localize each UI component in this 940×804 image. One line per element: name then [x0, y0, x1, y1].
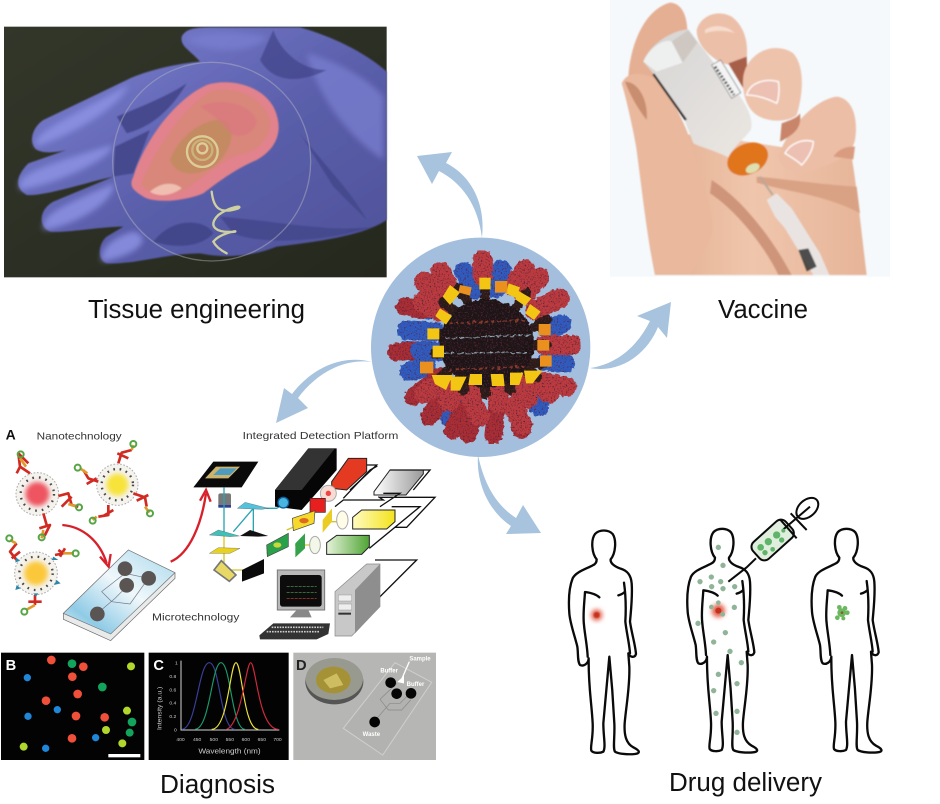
icon: purple gloved hand	[18, 27, 387, 263]
y axis ticks: 0	[174, 727, 177, 733]
panel A: nano and microtechnology detection diagram	[6, 426, 435, 641]
label: Drug delivery: Drug delivery	[669, 769, 822, 797]
stems	[433, 283, 547, 393]
front red spikes	[423, 259, 572, 425]
back red spikes	[396, 307, 522, 435]
icon: orange cap	[722, 136, 773, 182]
tumour with particles	[709, 600, 725, 617]
ring finger	[778, 97, 856, 173]
chip labels: Sample	[409, 657, 431, 663]
icon: fingernails	[747, 80, 779, 103]
axes	[181, 661, 279, 730]
green particles in syringe	[757, 529, 785, 555]
yellow and orange collars	[420, 278, 552, 391]
chip labels: Waste	[363, 732, 381, 738]
spikes and core	[396, 259, 572, 435]
microfluidic chip	[343, 663, 432, 755]
third finger	[728, 57, 748, 97]
optics paths	[224, 487, 337, 570]
x axis ticks: 600	[242, 737, 250, 743]
figure 1: body with tumour	[569, 530, 639, 754]
front blue spike	[420, 351, 435, 352]
circulating particles	[695, 545, 744, 735]
blue beads	[24, 674, 99, 752]
y axis ticks: 0.4	[169, 701, 176, 707]
y axis ticks: 1	[175, 661, 178, 667]
icon: coil in ear	[187, 136, 218, 167]
panel letter D: D	[296, 658, 307, 674]
y axis ticks: 0.6	[169, 687, 176, 693]
pointer arrow	[399, 662, 409, 683]
icon: coin	[305, 658, 363, 704]
label: Diagnosis: Diagnosis	[160, 771, 275, 799]
icon: glass vial	[643, 29, 752, 157]
x axis ticks: 400	[176, 737, 185, 743]
label: Tissue engineering: Tissue engineering	[88, 296, 305, 324]
computer monitor	[277, 570, 325, 617]
icon: syringe	[728, 494, 822, 582]
y axis ticks	[169, 661, 178, 733]
index finger behind vial	[628, 3, 687, 80]
panel D: chip next to coin photo	[293, 653, 436, 760]
label: Integrated Detection Platform: Integrated Detection Platform	[243, 431, 398, 442]
panel C: emission spectra chart	[149, 653, 289, 760]
optics mirrors	[209, 502, 268, 582]
icon: bioprinted ear	[131, 82, 279, 201]
scale bar	[108, 754, 140, 757]
panel: tissue engineering photo	[4, 27, 387, 277]
second finger	[697, 13, 747, 65]
x axis ticks: 650	[258, 737, 266, 743]
figure 2: body with syringe and circulating particles	[687, 494, 822, 753]
red laser module	[310, 458, 377, 512]
x axis ticks: 700	[273, 737, 282, 743]
y axis title: Intensity (a.u.)	[156, 687, 163, 730]
wells	[369, 677, 416, 727]
yellow beads	[20, 662, 135, 751]
icon: petri dish	[113, 62, 311, 261]
panel: vaccine photo	[610, 0, 890, 277]
palm creases	[710, 180, 792, 275]
icon: wire	[212, 192, 239, 253]
thumb	[622, 74, 712, 275]
detector box and wiring	[335, 466, 435, 600]
red beads	[42, 656, 109, 743]
microscope screen	[193, 462, 258, 508]
arrow: to drug delivery	[478, 455, 541, 534]
arrow: to diagnosis	[276, 360, 372, 423]
panel: drug delivery figures	[569, 494, 881, 754]
yellow laser module	[292, 508, 395, 533]
arrow: to tissue engineering	[417, 152, 483, 238]
nanoparticle: orange	[6, 535, 79, 615]
label: Nanotechnology: Nanotechnology	[37, 431, 123, 442]
green beads	[68, 659, 136, 737]
microfluidic chip	[63, 550, 175, 641]
y axis ticks: 0.8	[169, 674, 176, 680]
panel letter B: B	[6, 658, 16, 674]
panel letter C: C	[153, 658, 164, 674]
panel B: fluorescent beads	[1, 653, 144, 760]
arrow: to vaccine	[590, 302, 671, 369]
computer tower	[335, 564, 380, 636]
keyboard	[259, 623, 330, 639]
panel: nanoparticle virus in circle	[371, 238, 590, 457]
x axis ticks: 500	[210, 737, 218, 743]
nanoparticle: yellow	[75, 441, 153, 524]
label: Vaccine: Vaccine	[718, 296, 808, 324]
panel letter A: A	[6, 426, 16, 442]
chip labels: Buffer	[380, 669, 399, 675]
nanoparticle: red	[16, 451, 82, 540]
blue circle	[371, 238, 590, 457]
x axis ticks	[176, 737, 282, 743]
back blue spikes	[405, 269, 565, 417]
green laser module	[267, 533, 369, 557]
x axis ticks: 450	[193, 737, 202, 743]
channels	[374, 683, 411, 722]
figure 3: body with treated tumour	[812, 529, 881, 753]
y axis ticks: 0.2	[169, 714, 176, 720]
arrow: nanotechnology to chip	[62, 525, 111, 567]
arrow: chip to platform	[171, 490, 211, 562]
chip labels	[363, 657, 431, 738]
chip labels: Buffer	[407, 682, 425, 688]
palm and wrist	[637, 133, 867, 275]
label: Microtechnology: Microtechnology	[152, 613, 240, 624]
icon: syringe	[760, 177, 773, 195]
x axis ticks: 550	[226, 737, 234, 743]
core	[439, 299, 534, 387]
x axis title: Wavelength (nm)	[198, 746, 261, 755]
icon: hand holding vial	[622, 3, 867, 275]
camera	[275, 448, 337, 510]
spectrum curves	[182, 663, 278, 729]
